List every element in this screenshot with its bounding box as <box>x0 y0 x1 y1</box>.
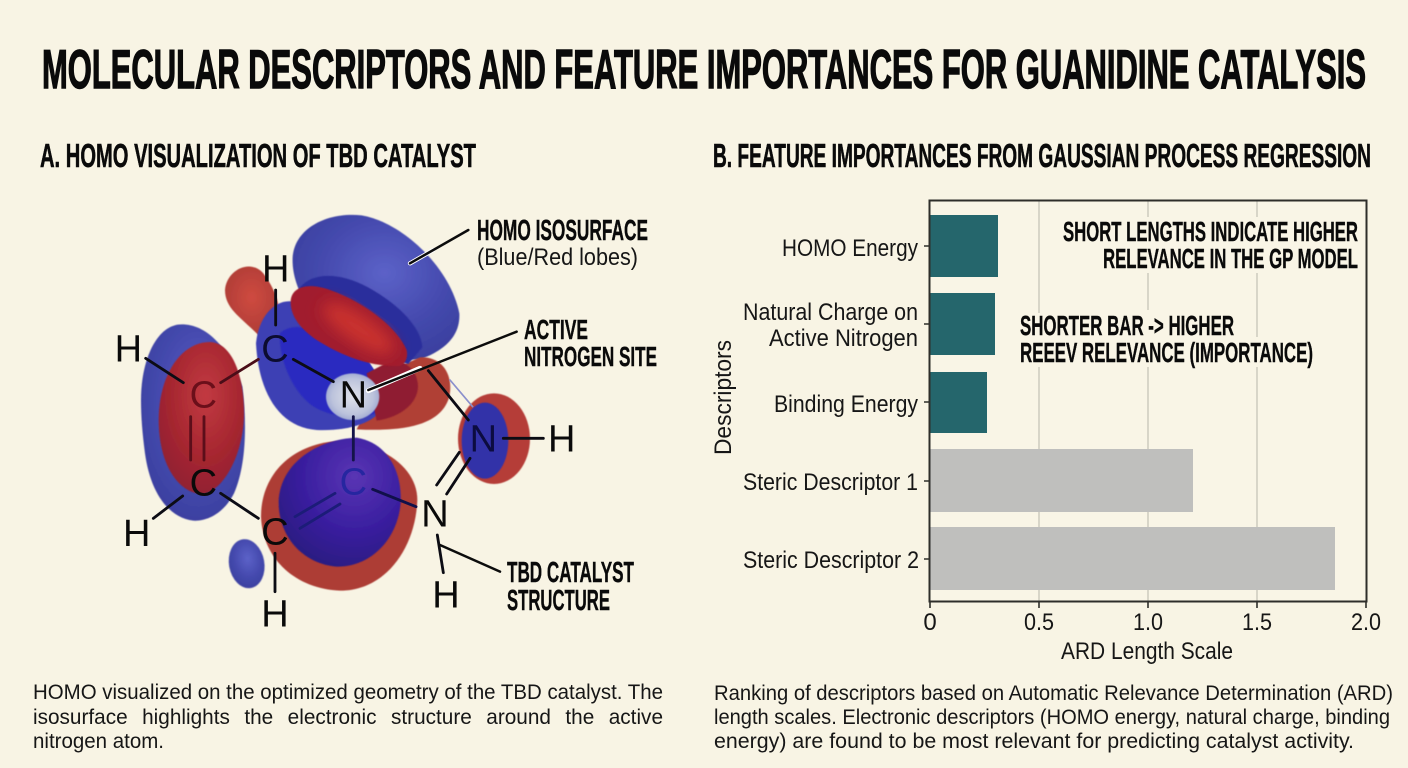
atom labels: C <box>261 328 289 370</box>
text block: panel A caption: HOMO visualized on the optimized geometry of the TBD catalyst. The <box>33 680 663 704</box>
callout: TBD catalyst structure <box>507 557 634 617</box>
x axis title: ARD Length Scale <box>1061 638 1233 665</box>
bar: Steric Descriptor 2 <box>930 527 1335 590</box>
y axis category labels: Steric Descriptor 1 <box>743 469 918 496</box>
atom labels: N <box>470 419 497 461</box>
icon: left blue lobe <box>141 324 245 521</box>
x axis tick labels: 1.5 <box>1242 609 1272 636</box>
callout: HOMO isosurface <box>477 215 648 271</box>
y axis title: Descriptors <box>710 340 737 455</box>
y axis category labels <box>743 235 919 574</box>
x axis tick labels: 0.5 <box>1024 609 1054 636</box>
x axis tick labels: 0 <box>923 609 937 636</box>
icon: inner dark blue lobe <box>280 327 384 417</box>
x axis tick labels <box>923 609 1381 636</box>
icon: left red lobe <box>159 342 244 494</box>
panel: HOMO molecule diagram <box>115 215 575 636</box>
callout: HOMO isosurface: (Blue/Red lobes) <box>477 244 638 271</box>
icon: small blue lobe <box>225 536 268 591</box>
atom labels: N <box>340 374 367 416</box>
panel: feature importance bar chart <box>710 200 1381 665</box>
annotation: shorter bar <box>1020 310 1313 368</box>
atom labels: H <box>432 574 460 616</box>
icon: dark blue band <box>300 276 422 364</box>
icon: top blue lobe <box>293 215 459 360</box>
annotation: short lengths <box>1063 216 1358 274</box>
atom labels: C <box>340 462 367 504</box>
bar: Natural Charge on Active Nitrogen <box>930 293 995 355</box>
heading: panel A: A. HOMO VISUALIZATION OF TBD CATALYST <box>40 137 476 174</box>
text block: panel A caption: isosurface highlights the electronic structure around the active <box>33 705 663 729</box>
y axis category labels: Binding Energy <box>774 391 919 418</box>
callout: active nitrogen site <box>524 314 657 372</box>
text block: panel A caption <box>33 680 663 753</box>
bar: Steric Descriptor 1 <box>930 449 1193 512</box>
icon: dark red behind nitrogen <box>367 359 418 421</box>
icon: small red lobe <box>225 267 278 335</box>
callout: active nitrogen site: NITROGEN SITE <box>524 341 657 372</box>
text block: panel A caption: nitrogen atom. <box>33 729 164 753</box>
x axis tick labels: 1.0 <box>1133 609 1163 636</box>
icon: central blue lobe <box>256 301 387 430</box>
bar: Binding Energy <box>930 372 987 433</box>
y axis category labels: HOMO Energy <box>782 235 919 262</box>
y axis category labels: Natural Charge on <box>743 299 918 326</box>
bar: HOMO Energy <box>930 215 998 277</box>
icon: right red lobe <box>458 393 530 484</box>
plot frame <box>930 200 1366 602</box>
atom labels: H <box>262 248 289 290</box>
callout: HOMO isosurface: HOMO ISOSURFACE <box>477 215 648 247</box>
y axis category labels: Active Nitrogen <box>769 325 918 352</box>
callout: TBD catalyst structure: TBD CATALYST <box>507 557 634 589</box>
icon: bottom blue lobe <box>279 438 401 567</box>
y axis category labels: Steric Descriptor 2 <box>743 547 919 574</box>
atom labels: C <box>261 512 289 554</box>
bonds <box>146 290 543 592</box>
atom labels: N <box>421 494 449 536</box>
x axis tick labels: 2.0 <box>1351 609 1381 636</box>
icon: active nitrogen glow <box>326 373 379 420</box>
icon: bottom red lobe <box>261 441 417 591</box>
atom labels: H <box>123 513 150 555</box>
atom labels <box>115 248 575 636</box>
plot background <box>929 201 1367 601</box>
icon: central red lobe <box>291 286 407 366</box>
atom labels: C <box>190 462 217 504</box>
atom labels: H <box>548 419 575 461</box>
leader lines <box>368 230 517 572</box>
text block: panel B caption: energy) are found to be most relevant for predicting catalyst activity. <box>714 729 1354 753</box>
icon: right blue lobe <box>462 403 508 479</box>
icon: right red lobe near nitrogen <box>357 357 450 430</box>
annotation: shorter bar: SHORTER BAR -> HIGHER <box>1020 310 1234 341</box>
callout: TBD catalyst structure: STRUCTURE <box>507 585 610 617</box>
text block: panel B caption <box>714 681 1393 753</box>
atom labels: H <box>115 328 142 370</box>
atom labels: H <box>261 594 289 636</box>
callout: active nitrogen site: ACTIVE <box>524 314 588 345</box>
atom labels: C <box>190 374 217 416</box>
